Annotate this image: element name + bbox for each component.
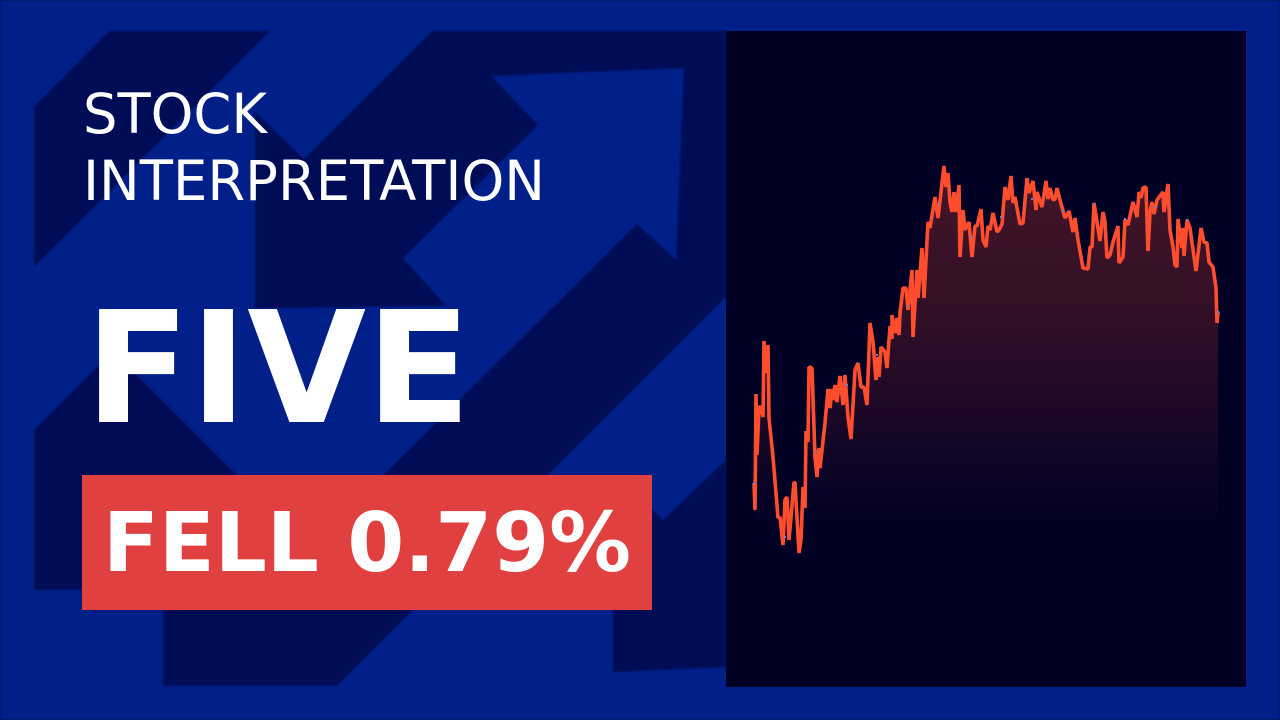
chart panel (726, 31, 1246, 687)
arrow shape: lower right (613, 460, 726, 672)
panel background (726, 31, 1246, 687)
heading line 2: INTERPRETATION (83, 149, 545, 213)
heading line 1: STOCK (83, 82, 269, 146)
change callout (82, 475, 652, 610)
data point markers (753, 198, 1219, 538)
price line (754, 166, 1218, 553)
arrow shape: upper left band (34, 31, 270, 267)
heading: stock interpretation (83, 82, 545, 213)
arrow shape: large upper arrow with light cut-out (34, 31, 726, 686)
ticker symbol: FIVE (85, 278, 471, 459)
price area fill (754, 166, 1218, 560)
callout text: FELL 0.79% (103, 496, 631, 591)
background arrow shapes (34, 31, 726, 686)
callout box (82, 475, 652, 610)
